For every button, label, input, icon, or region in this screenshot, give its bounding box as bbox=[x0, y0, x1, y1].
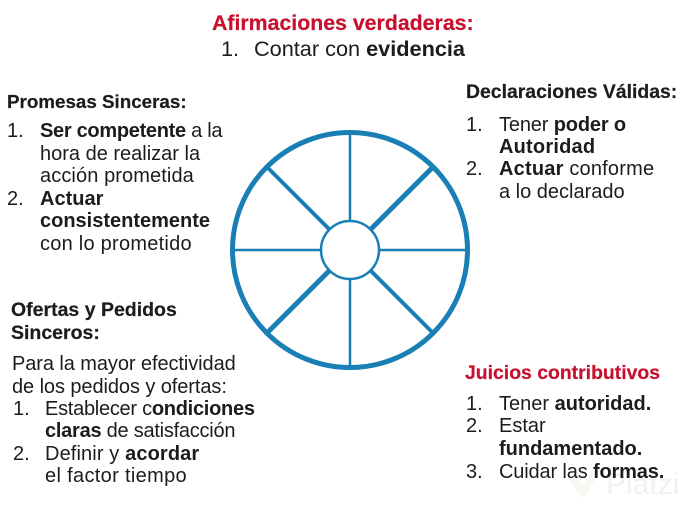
list: promesas sinceras: Actuar bbox=[40, 188, 103, 210]
list: promesas sinceras: 1. bbox=[7, 120, 24, 142]
list: declaraciones validas bbox=[466, 114, 654, 203]
title: afirmaciones verdaderas: Afirmaciones verdaderas: bbox=[212, 11, 474, 35]
list: declaraciones validas: 1. bbox=[466, 114, 483, 136]
heading: promesas sinceras: Promesas Sinceras: bbox=[7, 91, 187, 112]
heading: ofertas y pedidos sinceros bbox=[11, 299, 177, 344]
list: promesas sinceras: consistentemente bbox=[40, 210, 210, 232]
heading: ofertas y pedidos sinceros: Sinceros: bbox=[11, 322, 100, 344]
text and list: ofertas y pedidos: claras de satisfacción bbox=[45, 420, 235, 442]
list: juicios contributivos: 1. bbox=[466, 393, 483, 415]
watermark: platzi bbox=[568, 468, 679, 501]
list: declaraciones validas: Actuar conforme bbox=[499, 158, 654, 180]
text and list: ofertas y pedidos: 2. bbox=[13, 443, 30, 465]
heading: juicios contributivos: Juicios contributivos bbox=[465, 362, 660, 384]
heading: declaraciones validas: Declaraciones Válidas: bbox=[466, 81, 677, 103]
watermark: platzi: Platzi bbox=[606, 468, 679, 501]
list: promesas sinceras: con lo prometido bbox=[40, 233, 192, 255]
list: declaraciones validas: Tener poder o bbox=[499, 114, 626, 136]
list: juicios contributivos: 3. bbox=[466, 461, 483, 483]
list: juicios contributivos: 2. bbox=[466, 415, 483, 437]
text and list: ofertas y pedidos: el factor tiempo bbox=[45, 465, 187, 487]
text and list: ofertas y pedidos: Para la mayor efectividad bbox=[12, 353, 236, 375]
list: juicios contributivos: Tener autoridad. bbox=[499, 393, 651, 415]
list: promesas sinceras: hora de realizar la bbox=[40, 143, 200, 165]
list: juicios contributivos: Cuidar las formas. bbox=[499, 461, 664, 483]
list: juicios contributivos bbox=[466, 393, 664, 483]
text and list: ofertas y pedidos: Establecer condiciones bbox=[45, 398, 255, 420]
list: declaraciones validas: 2. bbox=[466, 158, 483, 180]
list: promesas sinceras: Ser competente a la bbox=[40, 120, 222, 142]
list: declaraciones validas: Autoridad bbox=[499, 136, 595, 158]
list: declaraciones validas: a lo declarado bbox=[499, 181, 625, 203]
text and list: ofertas y pedidos: de los pedidos y ofertas: bbox=[12, 376, 227, 398]
list: promesas sinceras bbox=[7, 120, 222, 255]
text and list: ofertas y pedidos: Definir y acordar bbox=[45, 443, 199, 465]
list: juicios contributivos: fundamentado. bbox=[499, 438, 642, 460]
text and list: ofertas y pedidos bbox=[12, 353, 255, 487]
text and list: ofertas y pedidos: 1. bbox=[13, 398, 30, 420]
text: contar con evidencia: Contar con evidencia bbox=[254, 36, 465, 61]
list: promesas sinceras: 2. bbox=[7, 188, 24, 210]
list: promesas sinceras: acción prometida bbox=[40, 165, 194, 187]
heading: ofertas y pedidos sinceros: Ofertas y Pedidos bbox=[11, 299, 177, 321]
list: juicios contributivos: Estar bbox=[499, 415, 546, 437]
text: contar con evidencia: 1. bbox=[221, 36, 239, 61]
